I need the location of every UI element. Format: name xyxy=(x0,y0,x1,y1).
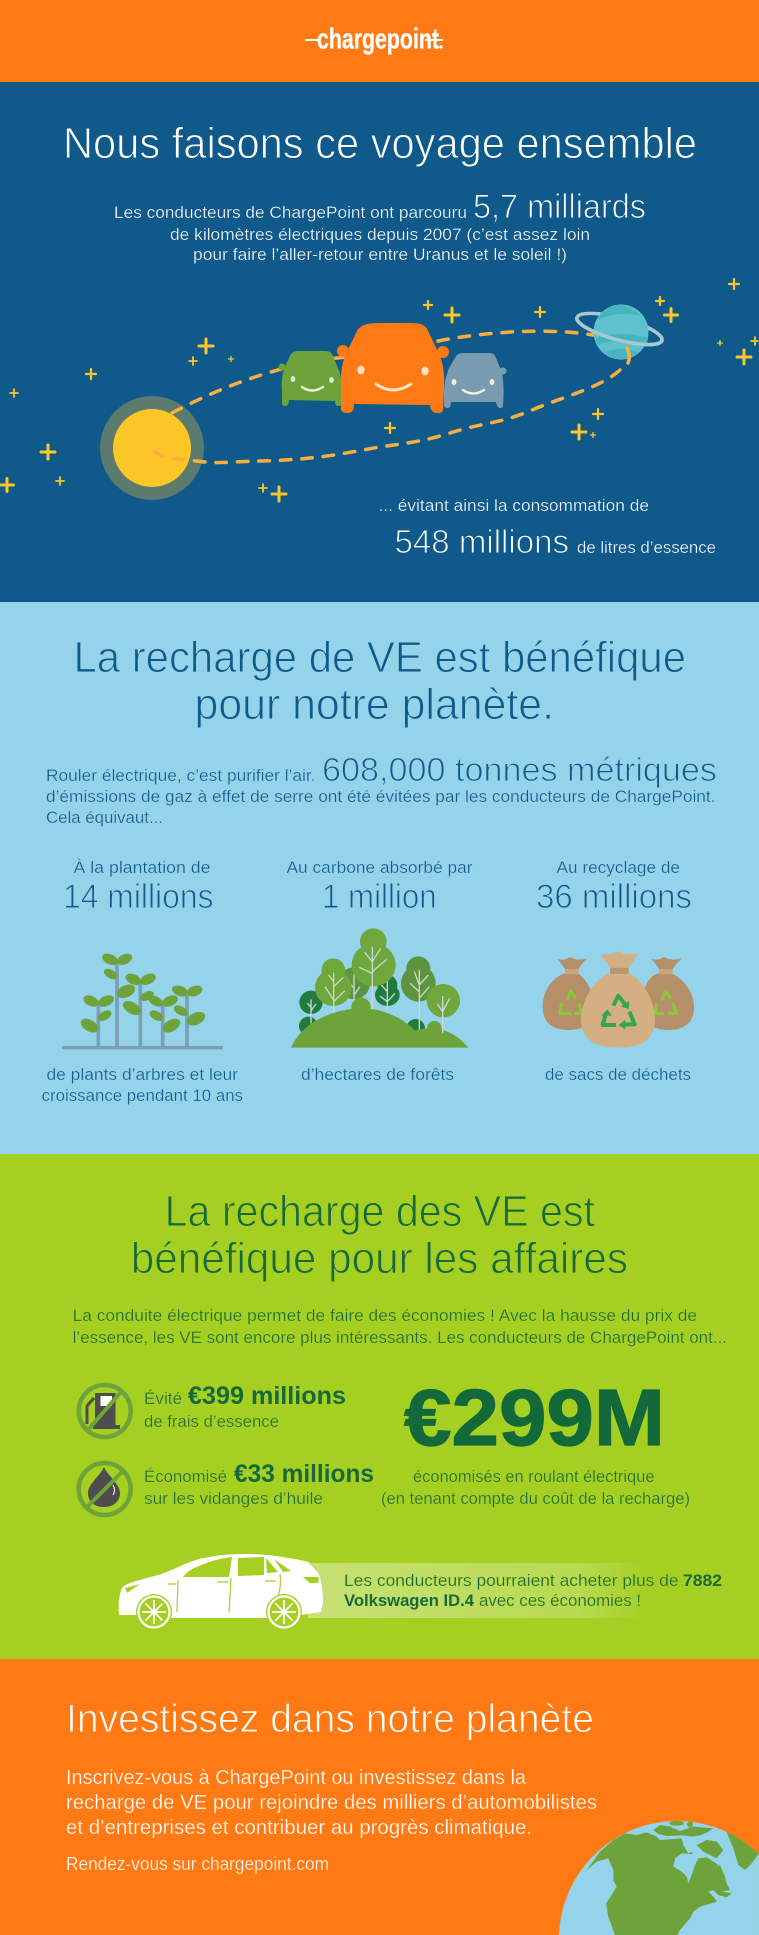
text block: call to action xyxy=(66,1767,597,1839)
text block: volkswagen: Les conducteurs pourraient acheter plus de xyxy=(344,1571,678,1590)
heading: planet: pour notre planète. xyxy=(194,680,554,729)
icon: globe xyxy=(559,1821,759,1935)
text block: call to action: et d’entreprises et contribuer au progrès climatique. xyxy=(66,1817,532,1839)
column: forests: Au carbone absorbé par xyxy=(286,858,473,877)
column: waste bags xyxy=(536,858,694,1084)
dashed orbit xyxy=(154,331,620,463)
heading: business: bénéfique pour les affaires xyxy=(131,1234,628,1283)
column: trees xyxy=(42,858,243,1105)
text block: total savings: économisés en roulant électrique xyxy=(413,1467,654,1486)
text block: fuel savings: €399 millions xyxy=(188,1382,346,1410)
text block: distance: Les conducteurs de ChargePoint ont parcouru xyxy=(114,203,467,222)
text block: fuel savings xyxy=(144,1382,346,1431)
big number: 299M: €299M xyxy=(404,1373,665,1462)
column: trees: 14 millions xyxy=(63,878,214,916)
icon: no fuel pump xyxy=(79,1385,131,1437)
column: forests: 1 million xyxy=(322,878,437,916)
column: waste bags: 36 millions xyxy=(536,878,692,916)
text block: fuel avoided: 548 millions xyxy=(394,523,569,560)
text block: distance: 5,7 milliards xyxy=(473,188,646,226)
text block: emissions: d’émissions de gaz à effet de serre ont été évitées par les conducteurs de ChargePoint. xyxy=(46,787,716,806)
column: forests xyxy=(286,858,473,1084)
text block: volkswagen: 7882 xyxy=(683,1571,722,1590)
icon: white car xyxy=(119,1554,323,1630)
stars xyxy=(0,279,758,501)
text block: distance xyxy=(114,188,646,264)
icon: no oil drop xyxy=(79,1463,131,1515)
heading: journey: Nous faisons ce voyage ensemble xyxy=(63,119,697,168)
logo: chargepoint: chargepoint xyxy=(317,24,439,56)
text block: savings intro xyxy=(73,1306,727,1347)
text block: oil savings: €33 millions xyxy=(234,1460,374,1488)
text block: call to action: Inscrivez-vous à ChargePoint ou investissez dans la xyxy=(66,1767,527,1789)
text block: total savings: (en tenant compte du coût de la recharge) xyxy=(381,1489,690,1508)
text block: emissions: 608,000 tonnes métriques xyxy=(322,751,717,788)
link text: Rendez-vous sur chargepoint.com xyxy=(66,1854,329,1874)
text block: savings intro: l’essence, les VE sont encore plus intéressants. Les conducteurs de ChargePoint ont... xyxy=(73,1328,727,1347)
column: forests: d’hectares de forêts xyxy=(301,1065,454,1084)
column: waste bags: de sacs de déchets xyxy=(545,1065,691,1084)
callout band xyxy=(308,1563,648,1618)
text block: savings intro: La conduite électrique permet de faire des économies ! Avec la hausse du prix de xyxy=(73,1306,697,1325)
text block: volkswagen: Volkswagen ID.4 xyxy=(344,1591,475,1610)
text block: emissions: Rouler électrique, c’est purifier l’air. xyxy=(46,766,316,785)
column: trees: croissance pendant 10 ans xyxy=(42,1086,243,1105)
text block: fuel savings: de frais d’essence xyxy=(144,1412,279,1431)
text block: distance: de kilomètres électriques depuis 2007 (c’est assez loin xyxy=(170,225,590,244)
text block: fuel avoided: de litres d’essence xyxy=(577,538,716,557)
heading: planet xyxy=(74,633,686,729)
icon: sun xyxy=(100,396,204,500)
text block: volkswagen: avec ces économies ! xyxy=(479,1591,641,1610)
panel: header xyxy=(0,0,759,82)
column: waste bags: Au recyclage de xyxy=(556,858,680,877)
text block: fuel savings: Évité xyxy=(144,1389,182,1408)
icon: recycling bags xyxy=(543,952,694,1048)
icon: orange car xyxy=(337,323,449,413)
panel: journey xyxy=(0,82,759,602)
column: trees: À la plantation de xyxy=(74,858,210,877)
icon: forest xyxy=(291,928,468,1048)
text block: call to action: recharge de VE pour rejoindre des milliers d’automobilistes xyxy=(66,1792,597,1814)
text block: emissions: Cela équivaut... xyxy=(46,808,163,827)
panel: planet benefits xyxy=(0,602,759,1154)
text block: oil savings: Économisé xyxy=(144,1467,227,1486)
text block: emissions xyxy=(46,751,717,827)
column: trees: de plants d’arbres et leur xyxy=(46,1065,238,1084)
icon: grey car xyxy=(444,353,506,408)
heading: business xyxy=(131,1187,628,1283)
text block: oil savings: sur les vidanges d’huile xyxy=(144,1489,323,1508)
heading: invest: Investissez dans notre planète xyxy=(66,1697,594,1741)
text block: volkswagen xyxy=(344,1571,722,1610)
panel: invest xyxy=(66,1703,759,1935)
text block: fuel avoided: ... évitant ainsi la consommation de xyxy=(378,496,649,515)
icon: green car xyxy=(278,351,342,406)
icon: planet Uranus xyxy=(574,304,665,363)
heading: planet: La recharge de VE est bénéfique xyxy=(74,633,686,682)
text block: fuel avoided xyxy=(378,496,716,560)
heading: business: La recharge des VE est xyxy=(165,1187,595,1236)
text block: total savings xyxy=(381,1467,690,1508)
text block: oil savings xyxy=(144,1460,374,1508)
icon: seedlings xyxy=(63,951,221,1048)
text block: distance: pour faire l’aller-retour entre Uranus et le soleil !) xyxy=(193,245,567,264)
panel: business benefits xyxy=(0,1154,759,1659)
